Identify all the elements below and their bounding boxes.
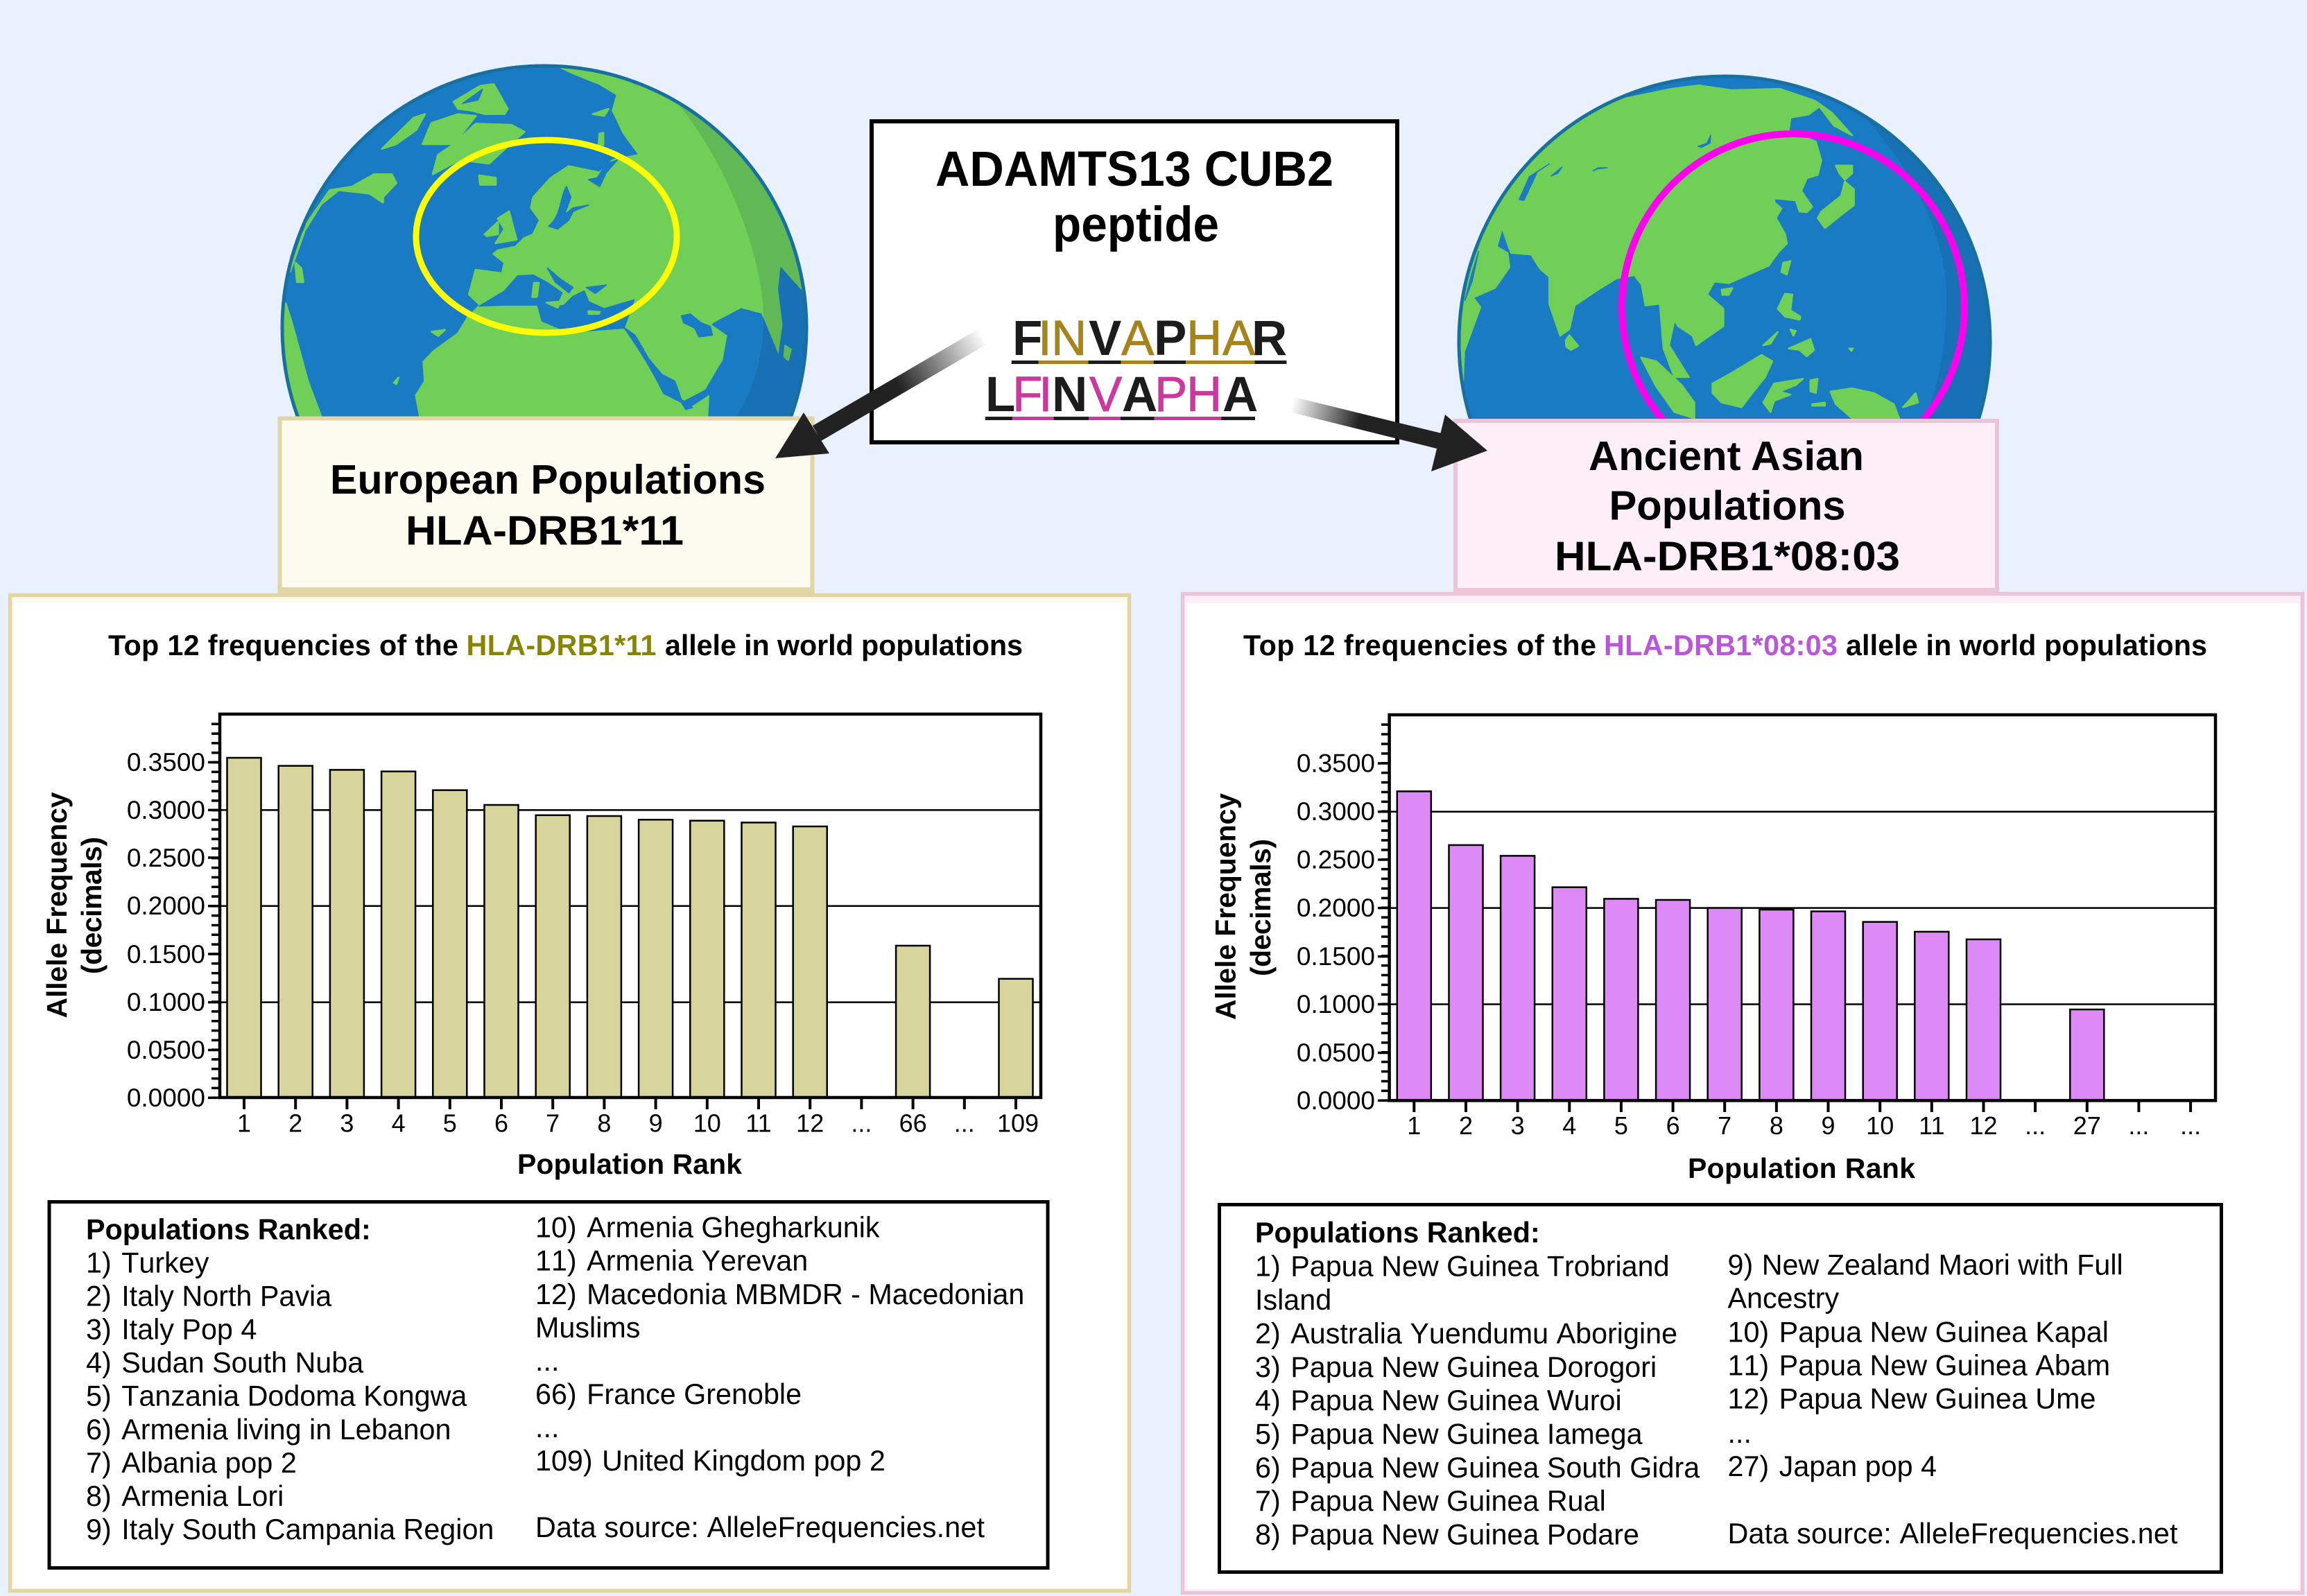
y axis tick labels: 0.3000 (1297, 797, 1375, 826)
y axis tick labels: 0.1500 (1297, 942, 1375, 971)
region marker: East Asia ellipse (1618, 130, 1968, 419)
legend: populations ranked: 7) Albania pop 2 (86, 1447, 297, 1479)
arrow: peptide to Ancient Asian populations (1292, 397, 1487, 471)
x axis tick labels: 10 (693, 1109, 721, 1137)
legend: populations ranked: 2) Australia Yuendumu Aborigine (1255, 1318, 1677, 1350)
x axis tick labels: 12 (796, 1109, 824, 1137)
y axis tick labels: 0.2000 (127, 892, 205, 920)
label: European Populations: HLA-DRB1*11 (406, 508, 684, 553)
legend: populations ranked: 7) Papua New Guinea Rual (1255, 1485, 1606, 1517)
y axis tick labels: 0.1000 (1297, 990, 1375, 1018)
legend: populations ranked: 1) Turkey (86, 1247, 209, 1278)
bar chart: HLA-DRB1*08:03 (1210, 715, 2215, 1184)
legend: populations ranked: 11) Armenia Yerevan (535, 1245, 808, 1277)
chart title: HLA-DRB1*11 (466, 630, 656, 661)
y axis tick labels: 0.1000 (127, 988, 205, 1016)
icon: globe centred on East Asia (1458, 75, 1991, 419)
x axis tick labels: 3 (1511, 1111, 1525, 1140)
y axis tick labels: 0.3000 (127, 796, 205, 824)
x axis tick labels: 9 (649, 1109, 663, 1137)
y axis tick labels: 0.3500 (127, 748, 205, 777)
heading: peptide name: ADAMTS13 CUB2 (935, 142, 1333, 197)
legend: populations ranked: ... (1728, 1417, 1752, 1449)
legend: populations ranked: 2) Italy North Pavia (86, 1280, 331, 1312)
legend: populations ranked: Data source: AlleleFrequencies.net (535, 1511, 985, 1543)
legend: populations ranked: 5) Tanzania Dodoma Kongwa (86, 1380, 467, 1412)
x axis tick labels: 11 (1919, 1111, 1944, 1140)
chart title: HLA-DRB1*08:03 (1604, 630, 1838, 661)
arrow: peptide to European populations (775, 329, 987, 458)
label: Ancient Asian Populations: Populations (1609, 483, 1846, 529)
legend: populations ranked: 12) Papua New Guinea Ume (1728, 1382, 2096, 1414)
legend: populations ranked: 10) Armenia Ghegharkunik (535, 1212, 880, 1244)
x axis tick labels (1407, 1111, 2201, 1140)
label: European Populations: European Populations (330, 457, 766, 503)
legend: populations ranked: Data source: AlleleFrequencies.net (1728, 1518, 2178, 1550)
legend: populations ranked: 8) Armenia Lori (86, 1480, 284, 1512)
legend: populations ranked: 66) France Grenoble (535, 1378, 802, 1410)
y axis tick labels (127, 748, 205, 1112)
y axis tick labels: 0.0500 (1297, 1039, 1375, 1067)
legend: populations ranked: 4) Sudan South Nuba (86, 1347, 363, 1379)
legend: populations ranked: 6) Armenia living in Lebanon (86, 1414, 451, 1446)
legend: populations ranked: 9) New Zealand Maori with Full (1728, 1249, 2123, 1281)
legend: populations ranked: 4) Papua New Guinea Wuroi (1255, 1385, 1622, 1416)
y axis tick labels (1297, 749, 1375, 1115)
x axis tick labels: ... (2025, 1111, 2046, 1140)
x axis tick labels: 10 (1866, 1111, 1894, 1140)
y axis tick labels: 0.0000 (1297, 1086, 1375, 1115)
x axis tick labels: 12 (1969, 1111, 1998, 1140)
legend: populations ranked: 8) Papua New Guinea Podare (1255, 1519, 1639, 1551)
chart title: allele in world populations (1846, 630, 2207, 661)
legend: populations ranked: Populations Ranked: (1255, 1217, 1540, 1249)
x axis tick labels: ... (2180, 1111, 2201, 1140)
legend: populations ranked: 3) Italy Pop 4 (86, 1313, 257, 1345)
heading: peptide name: peptide (1053, 198, 1219, 252)
legend: populations ranked: Muslims (535, 1312, 640, 1344)
legend: populations ranked (49, 1202, 1048, 1568)
x axis tick labels: 7 (546, 1109, 560, 1137)
x axis tick labels: 27 (2073, 1111, 2101, 1140)
label: Ancient Asian Populations: Ancient Asian (1589, 433, 1864, 479)
legend: populations ranked: 5) Papua New Guinea Iamega (1255, 1419, 1643, 1450)
x axis tick labels: 1 (1407, 1111, 1421, 1140)
x axis tick labels: 4 (1562, 1111, 1576, 1140)
x axis tick labels: ... (851, 1109, 872, 1137)
legend: populations ranked: 3) Papua New Guinea Dorogori (1255, 1351, 1657, 1383)
x axis tick labels: 5 (443, 1109, 457, 1137)
x axis tick labels: 7 (1718, 1111, 1731, 1140)
y axis tick labels: 0.2000 (1297, 894, 1375, 922)
chart title: Top 12 frequencies of the (108, 630, 458, 661)
legend: populations ranked: Island (1255, 1284, 1331, 1316)
x axis tick labels: 2 (1459, 1111, 1473, 1140)
label: European Populations (277, 419, 814, 594)
legend: populations ranked: 12) Macedonia MBMDR - Macedonian (535, 1278, 1024, 1310)
legend: populations ranked: 6) Papua New Guinea South Gidra (1255, 1452, 1700, 1484)
x axis tick labels: 66 (899, 1109, 927, 1137)
x axis tick labels: 109 (997, 1109, 1039, 1137)
panel: HLA-DRB1*11 frequencies (10, 595, 1129, 1590)
y axis title (1210, 793, 1277, 1020)
legend: populations ranked: 1) Papua New Guinea Trobriand (1255, 1250, 1670, 1282)
x axis tick labels: 8 (597, 1109, 611, 1137)
y axis title: (decimals) (76, 837, 107, 974)
legend: populations ranked: 27) Japan pop 4 (1728, 1450, 1937, 1482)
y axis title: (decimals) (1245, 839, 1277, 976)
x axis tick labels: 5 (1614, 1111, 1628, 1140)
x axis tick labels: 2 (288, 1109, 302, 1137)
legend: populations ranked: 10) Papua New Guinea Kapal (1728, 1316, 2109, 1348)
x axis tick labels: 4 (392, 1109, 406, 1137)
sequence: LFINVAPHA: LFINVAPHA (985, 367, 1258, 422)
x axis tick labels: 11 (745, 1109, 772, 1137)
y axis title: Allele Frequency (41, 792, 73, 1018)
x axis tick labels: 1 (237, 1109, 251, 1137)
x axis tick labels: 3 (340, 1109, 354, 1137)
y axis tick labels: 0.3500 (1297, 749, 1375, 778)
chart title: allele in world populations (665, 630, 1023, 661)
x axis tick labels: 6 (494, 1109, 508, 1137)
x axis tick labels: 6 (1666, 1111, 1680, 1140)
bar chart: HLA-DRB1*11 (41, 714, 1041, 1180)
y axis tick labels: 0.0500 (127, 1036, 205, 1064)
x axis tick labels: ... (954, 1109, 975, 1137)
x axis tick labels: 9 (1821, 1111, 1835, 1140)
icon: globe centred on Europe (280, 64, 809, 416)
panel: HLA-DRB1*08:03 frequencies (1183, 593, 2302, 1593)
chart title (108, 630, 1023, 661)
legend: populations ranked: Populations Ranked: (86, 1214, 371, 1246)
x axis tick labels: 8 (1770, 1111, 1783, 1140)
panel: ADAMTS13 CUB2 peptide (872, 121, 1397, 442)
x axis tick labels (237, 1109, 1039, 1137)
chart title (1243, 630, 2207, 661)
x axis title: Population Rank (1688, 1152, 1915, 1184)
y axis tick labels: 0.0000 (127, 1084, 205, 1112)
label: Ancient Asian Populations: HLA-DRB1*08:03 (1555, 534, 1900, 580)
legend: populations ranked: Ancestry (1728, 1283, 1840, 1315)
region marker: Europe ellipse (416, 140, 677, 333)
heading: peptide name (935, 142, 1333, 252)
legend: populations ranked: 11) Papua New Guinea Abam (1728, 1349, 2110, 1381)
x axis tick labels: ... (2128, 1111, 2149, 1140)
chart title: Top 12 frequencies of the (1243, 630, 1596, 661)
y axis tick labels: 0.2500 (1297, 846, 1375, 874)
legend: populations ranked (1219, 1205, 2222, 1572)
sequence: FINVAPHAR: FINVAPHAR (1012, 311, 1287, 366)
legend: populations ranked: 109) United Kingdom pop 2 (535, 1445, 885, 1477)
legend: populations ranked: 9) Italy South Campania Region (86, 1513, 494, 1545)
y axis title (41, 792, 107, 1018)
y axis tick labels: 0.1500 (127, 940, 205, 969)
legend: populations ranked: ... (535, 1345, 559, 1377)
y axis tick labels: 0.2500 (127, 844, 205, 872)
label: Ancient Asian Populations (1453, 421, 1999, 594)
x axis title: Population Rank (517, 1148, 742, 1180)
y axis title: Allele Frequency (1210, 793, 1242, 1020)
legend: populations ranked: ... (535, 1412, 559, 1443)
